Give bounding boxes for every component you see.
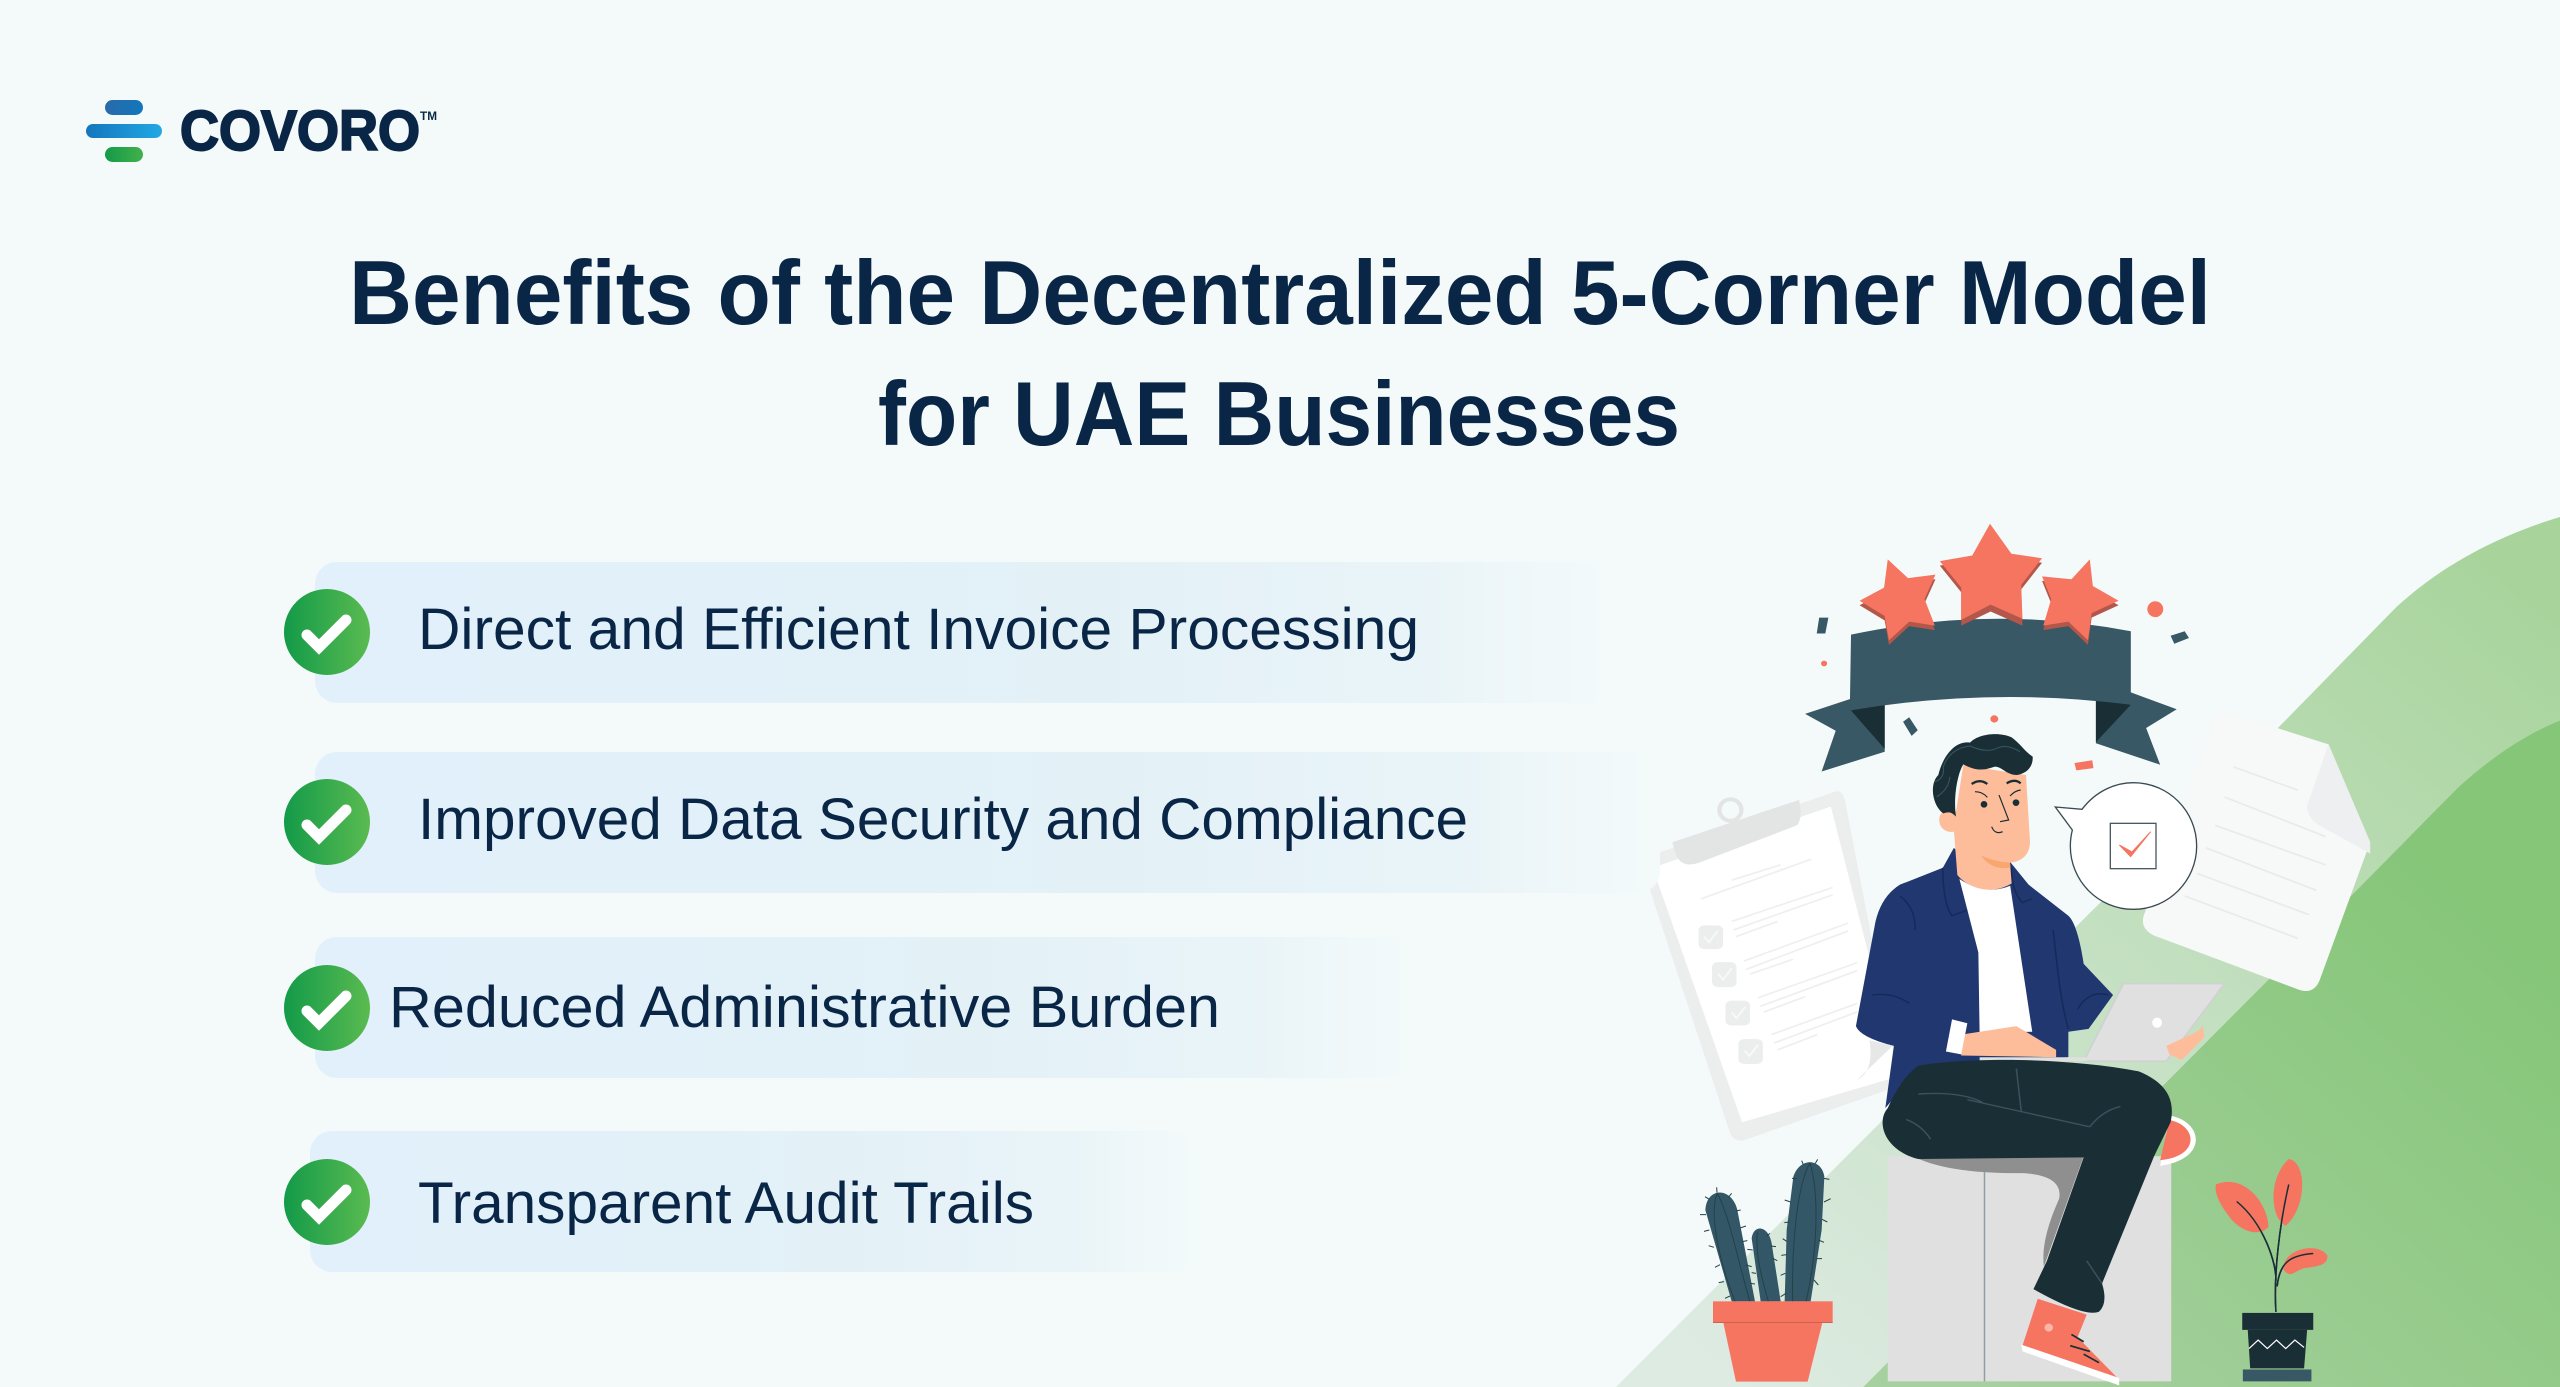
person (1856, 734, 2224, 1385)
row label: Direct and Efficient Invoice Processing (418, 597, 1419, 662)
benefit row 2 (284, 752, 1660, 893)
jacket seams (1872, 868, 2108, 1029)
row label: Transparent Audit Trails (418, 1171, 1034, 1236)
trademark: TM (420, 109, 437, 123)
row label: Reduced Administrative Burden (389, 975, 1220, 1040)
benefit row 4 (284, 1131, 1200, 1272)
row background (310, 1131, 1200, 1272)
shirt (1959, 879, 2032, 1033)
hands (1961, 1026, 2056, 1057)
title: for UAE Businesses (878, 364, 1680, 465)
laptop (2084, 984, 2224, 1061)
stars (1860, 524, 2119, 645)
logo mark (86, 100, 162, 162)
hair (1933, 734, 2033, 817)
ribbon (1805, 619, 2177, 772)
confetti (1817, 601, 2189, 770)
face and neck (1939, 765, 2030, 890)
benefit row 3 (284, 937, 1415, 1078)
cactus pot (1700, 1159, 1833, 1382)
light hill (1616, 517, 2560, 1387)
row background (315, 562, 1615, 703)
title: Benefits of the Decentralized 5-Corner Model (349, 243, 2211, 344)
illustration: background hills and character (1616, 517, 2560, 1387)
back shoe (2160, 1115, 2196, 1166)
jaw shadow (1981, 856, 2010, 868)
potted plant (2216, 1159, 2327, 1381)
pants (1883, 1060, 2172, 1313)
row background (315, 937, 1415, 1078)
row background (315, 752, 1660, 893)
speech bubble (2055, 783, 2197, 909)
check icon (284, 779, 370, 865)
document page (2143, 709, 2370, 991)
title (349, 243, 2211, 465)
check icon (284, 1159, 370, 1245)
row label: Improved Data Security and Compliance (418, 787, 1468, 852)
head (1933, 734, 2033, 890)
jacket (1856, 848, 2113, 1108)
logo (86, 99, 437, 163)
check icon (284, 965, 370, 1051)
front shoe (2022, 1299, 2119, 1380)
benefit row 1 (284, 562, 1615, 703)
check icon (284, 589, 370, 675)
logo wordmark: COVORO (180, 99, 420, 163)
clipboard (1640, 791, 1900, 1141)
box seat (1888, 1156, 2171, 1381)
face details (1972, 781, 2021, 833)
dark hill (1863, 721, 2560, 1387)
